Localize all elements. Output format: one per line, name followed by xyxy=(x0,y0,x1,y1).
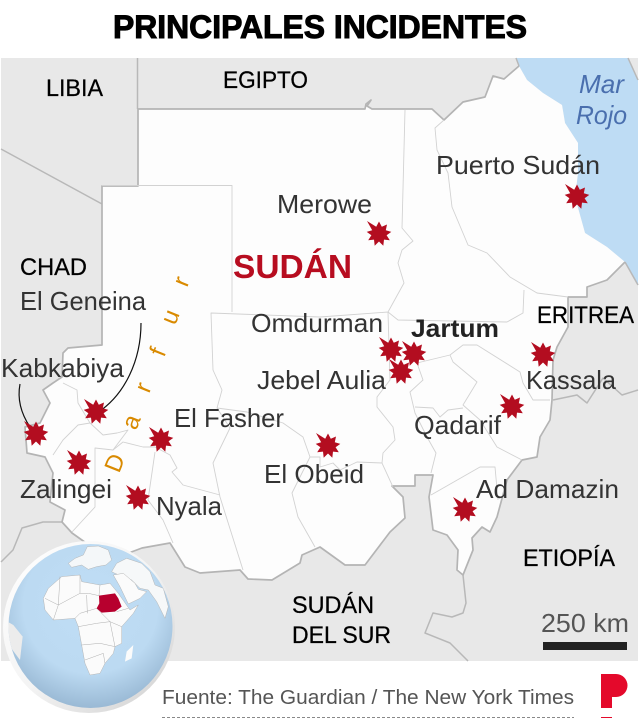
scale label: 250 km xyxy=(541,608,629,638)
country label: Sudan del Sur xyxy=(292,592,391,649)
madagascar xyxy=(125,645,133,662)
country label: Libia: LIBIA xyxy=(46,75,103,102)
incident markers xyxy=(24,184,589,522)
south america xyxy=(8,622,23,660)
region label: Darfur: Darfur xyxy=(100,273,196,476)
city label: Omdurman: Omdurman xyxy=(251,308,383,338)
scale bar xyxy=(543,642,627,650)
cut-off text line xyxy=(162,716,574,718)
source: Fuente: The Guardian / The New York Times xyxy=(162,687,574,709)
europe xyxy=(68,546,112,569)
sea label: Mar Rojo xyxy=(576,69,627,130)
title: PRINCIPALES INCIDENTES xyxy=(113,9,527,45)
logo xyxy=(601,674,628,708)
city label: Jartum: Jartum xyxy=(411,315,499,343)
city label: Jebel Aulia: Jebel Aulia xyxy=(257,365,387,395)
asia xyxy=(112,558,168,618)
country label: Etiopia: ETIOPÍA xyxy=(523,545,615,572)
logo cut-off mark xyxy=(601,717,612,718)
city label: El Fasher: El Fasher xyxy=(174,403,284,433)
country label: Eritrea: ERITREA xyxy=(537,302,634,329)
leader line: El Geneina xyxy=(97,323,141,413)
african borders xyxy=(45,575,128,663)
country label: Sudan: SUDÁN xyxy=(233,248,352,285)
city label: Merowe: Merowe xyxy=(277,189,372,219)
arabia xyxy=(113,573,147,604)
city label: Nyala: Nyala xyxy=(156,491,223,521)
city label: Kabkabiya: Kabkabiya xyxy=(1,353,125,383)
country label: Egipto: EGIPTO xyxy=(223,67,308,94)
sea label: Mar Rojo: Mar xyxy=(579,69,625,99)
city label: Puerto Sudan: Puerto Sudán xyxy=(436,150,600,180)
city label: Qadarif: Qadarif xyxy=(414,410,502,440)
country label: Sudan del Sur: DEL SUR xyxy=(292,622,391,649)
city label: El Geneina: El Geneina xyxy=(20,286,147,316)
red sea xyxy=(516,58,638,285)
sudan land border xyxy=(25,66,625,580)
state borders xyxy=(53,110,568,570)
city label: Ad Damazin: Ad Damazin xyxy=(476,474,619,504)
sea label: Mar Rojo: Rojo xyxy=(576,100,627,130)
city label: Zalingei: Zalingei xyxy=(20,474,112,504)
city label: El Obeid: El Obeid xyxy=(264,459,364,489)
country label: Sudan del Sur: SUDÁN xyxy=(292,592,374,619)
africa xyxy=(43,575,138,675)
locator globe xyxy=(2,541,175,713)
leader line: Kabkabiya xyxy=(19,384,30,427)
country label: Chad: CHAD xyxy=(20,254,87,281)
sudan highlight xyxy=(97,593,122,613)
city label: Kassala: Kassala xyxy=(526,365,617,395)
sudan territory xyxy=(25,66,625,580)
